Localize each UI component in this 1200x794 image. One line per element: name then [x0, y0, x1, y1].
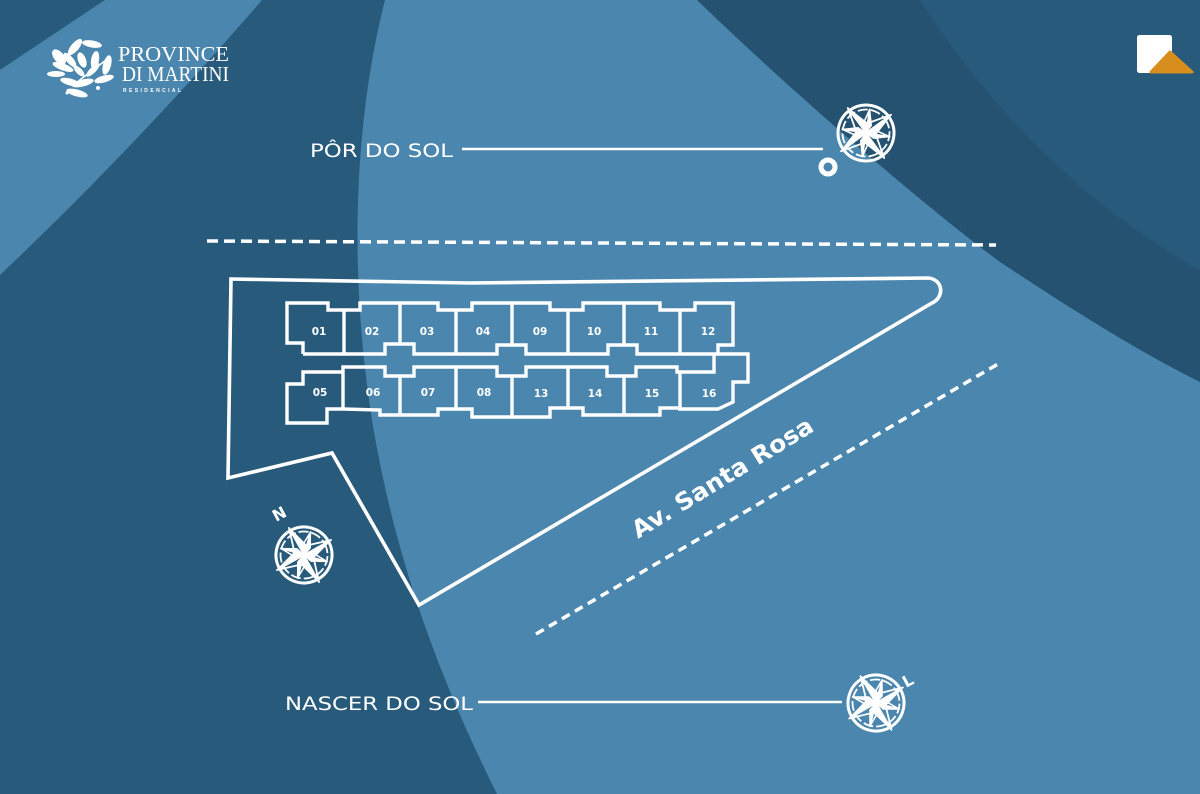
logo text: PROVINCE	[118, 42, 229, 66]
unit numbers: 01	[312, 326, 326, 338]
unit numbers: 08	[477, 387, 491, 399]
unit numbers	[312, 326, 716, 400]
unit numbers: 03	[420, 326, 434, 338]
unit numbers: 02	[365, 326, 379, 338]
unit numbers: 04	[476, 326, 490, 338]
icon: compass north: N	[269, 502, 290, 526]
icon: compass east	[834, 661, 918, 745]
unit numbers: 14	[588, 388, 602, 400]
unit numbers: 09	[533, 326, 547, 338]
icon: compass north	[262, 502, 346, 597]
label: pôr do sol: PÔR DO SOL	[310, 140, 454, 162]
unit numbers: 11	[644, 326, 658, 338]
building plan: units	[287, 303, 748, 423]
site outline	[228, 278, 941, 605]
unit numbers: 12	[701, 326, 715, 338]
unit outlines	[287, 303, 748, 423]
dashed road: top	[207, 241, 996, 245]
unit numbers: 10	[587, 326, 601, 338]
icon: compass east: L	[899, 670, 917, 692]
icon: compass west	[823, 90, 909, 176]
unit numbers: 05	[313, 387, 327, 399]
unit numbers: 07	[421, 387, 435, 399]
label: nascer do sol: NASCER DO SOL	[285, 694, 474, 715]
icon: olive wreath	[47, 37, 115, 99]
logo: Province di Martini: RESIDENCIAL	[123, 88, 181, 94]
unit numbers: 16	[702, 388, 716, 400]
dashed road: avenue	[536, 364, 998, 634]
street label: Av. Santa Rosa: Av. Santa Rosa	[627, 412, 818, 544]
logo: Province di Martini	[47, 37, 229, 99]
logo: Province di Martini: DI MARTINI	[122, 62, 229, 86]
icon: brand mark	[1137, 35, 1192, 73]
unit numbers: 15	[645, 388, 659, 400]
unit numbers: 13	[534, 388, 548, 400]
unit numbers: 06	[366, 387, 380, 399]
icon: sun marker	[821, 160, 835, 174]
